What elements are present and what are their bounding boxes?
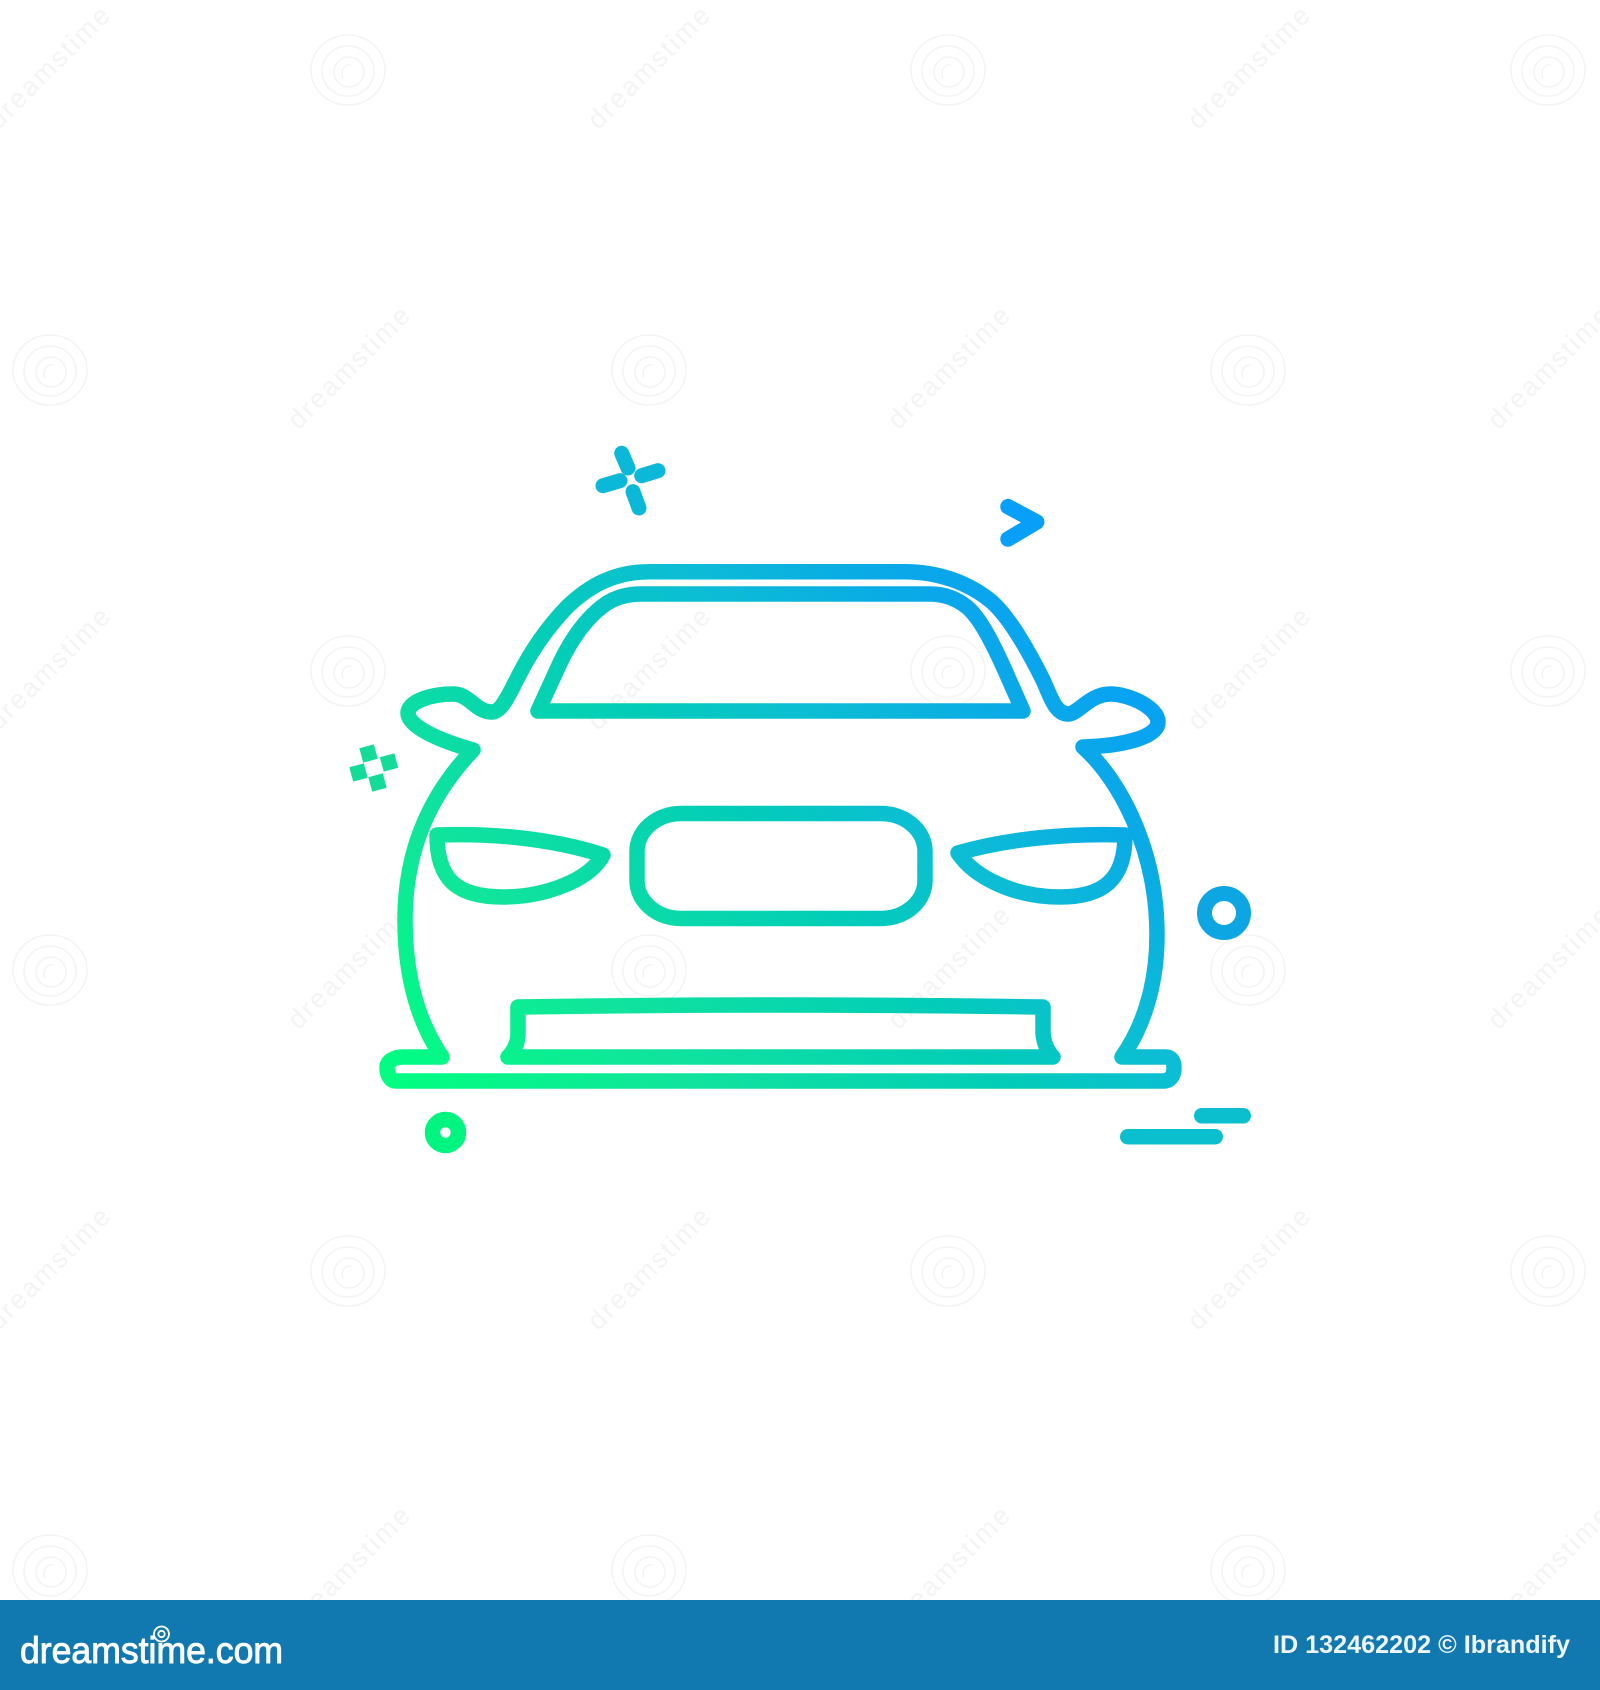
watermark pattern: dreamstime [1181, 0, 1316, 135]
watermark pattern: dreamstime [581, 0, 716, 135]
watermark pattern: dreamstime [1181, 601, 1316, 736]
watermark pattern: dreamstime [881, 300, 1016, 435]
bumper intake [508, 1005, 1053, 1057]
watermark pattern: dreamstime [581, 1201, 716, 1336]
watermark pattern: dreamstime [281, 1500, 416, 1635]
watermark pattern: dreamstime [881, 1500, 1016, 1635]
watermark pattern: dreamstime [581, 601, 716, 736]
watermark pattern: dreamstime [281, 900, 416, 1035]
footer image id and credit: ID 132462202 © Ibrandify [1273, 1631, 1570, 1659]
watermark pattern: dreamstime [881, 900, 1016, 1035]
windshield [538, 594, 1023, 711]
icon: checker sparkle [349, 744, 398, 792]
logo spiral [154, 1626, 169, 1642]
icon: four-petal sparkle [603, 453, 658, 508]
icon: green ring [432, 1120, 458, 1146]
footer logo text: dreamstime.com [20, 1630, 283, 1671]
watermark pattern: dreamstime [1181, 1201, 1316, 1336]
footer bar [0, 1600, 1600, 1690]
icon: chevron [1008, 507, 1037, 539]
watermark pattern: dreamstime [281, 300, 416, 435]
right headlight [958, 835, 1125, 897]
grille [637, 814, 925, 918]
icon: blue ring [1204, 894, 1244, 932]
car body outline with mirrors and base [387, 572, 1174, 1081]
icon: speed dashes [1120, 1108, 1251, 1144]
icon: car front view [387, 572, 1174, 1081]
left headlight [437, 835, 603, 897]
